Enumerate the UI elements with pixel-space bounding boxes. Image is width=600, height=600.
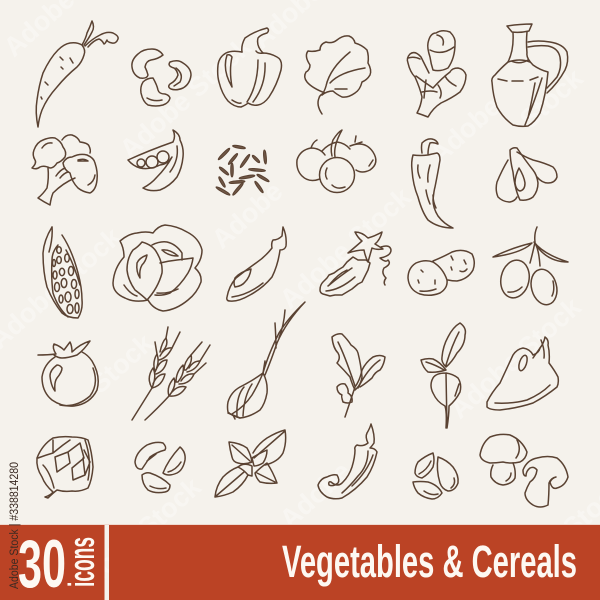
icon: seeds bbox=[413, 453, 458, 499]
icon: pepper half bbox=[487, 337, 558, 410]
icon: green onion bbox=[228, 302, 305, 419]
icon: ginger root bbox=[407, 31, 466, 117]
infographic canvas: Stock bbox=[84, 327, 159, 399]
icon: lettuce leaf bbox=[305, 36, 371, 114]
banner: left count block bbox=[0, 524, 600, 600]
icon: curled chili bbox=[318, 424, 377, 499]
icon: eggplant bbox=[227, 227, 286, 301]
icon: basil sprig bbox=[215, 430, 286, 497]
icon: oil jug bbox=[492, 24, 568, 126]
icon: chili pepper bbox=[412, 139, 453, 228]
infographic canvas: Adobe Stock bbox=[274, 181, 417, 314]
infographic canvas: Adobe bbox=[206, 176, 288, 254]
icon: cabbage bbox=[113, 225, 202, 311]
icon: carrot bbox=[36, 21, 118, 127]
infographic canvas: Adobe bbox=[424, 91, 506, 169]
infographic canvas: Adobe Stock bbox=[114, 31, 257, 164]
icon: radish bbox=[421, 323, 465, 428]
icon: olive branch bbox=[493, 227, 568, 308]
icon: potatoes bbox=[408, 250, 474, 295]
banner: title block bbox=[109, 525, 600, 600]
icon: cucumber with flower bbox=[320, 232, 391, 296]
icon: bell pepper bbox=[218, 28, 282, 107]
icon: tomato bbox=[38, 341, 98, 406]
icon: corn cob bbox=[43, 227, 82, 318]
label: icons: icons bbox=[61, 537, 102, 587]
icon: kidney beans bbox=[135, 442, 185, 493]
count: 30: 30 bbox=[18, 526, 66, 600]
infographic canvas: Adobe bbox=[274, 456, 356, 534]
icon: wheat ears bbox=[132, 327, 210, 420]
icon: garlic cloves bbox=[496, 148, 557, 202]
icon: broccoli bbox=[32, 135, 97, 205]
icon: cashew beans bbox=[132, 49, 191, 106]
icon: pea pod bbox=[128, 130, 183, 191]
icon: cherry tomatoes bbox=[297, 130, 376, 192]
icon: artichoke bbox=[37, 437, 93, 498]
infographic canvas: Stock bbox=[514, 62, 589, 134]
icon: arugula leaves bbox=[332, 334, 385, 417]
infographic canvas: Adobe Stock bbox=[444, 291, 587, 424]
icon: wild rice grains bbox=[215, 145, 270, 196]
stock id watermark: Adobe Stock | #338814280 bbox=[9, 462, 21, 589]
icon: mushrooms bbox=[480, 434, 568, 507]
